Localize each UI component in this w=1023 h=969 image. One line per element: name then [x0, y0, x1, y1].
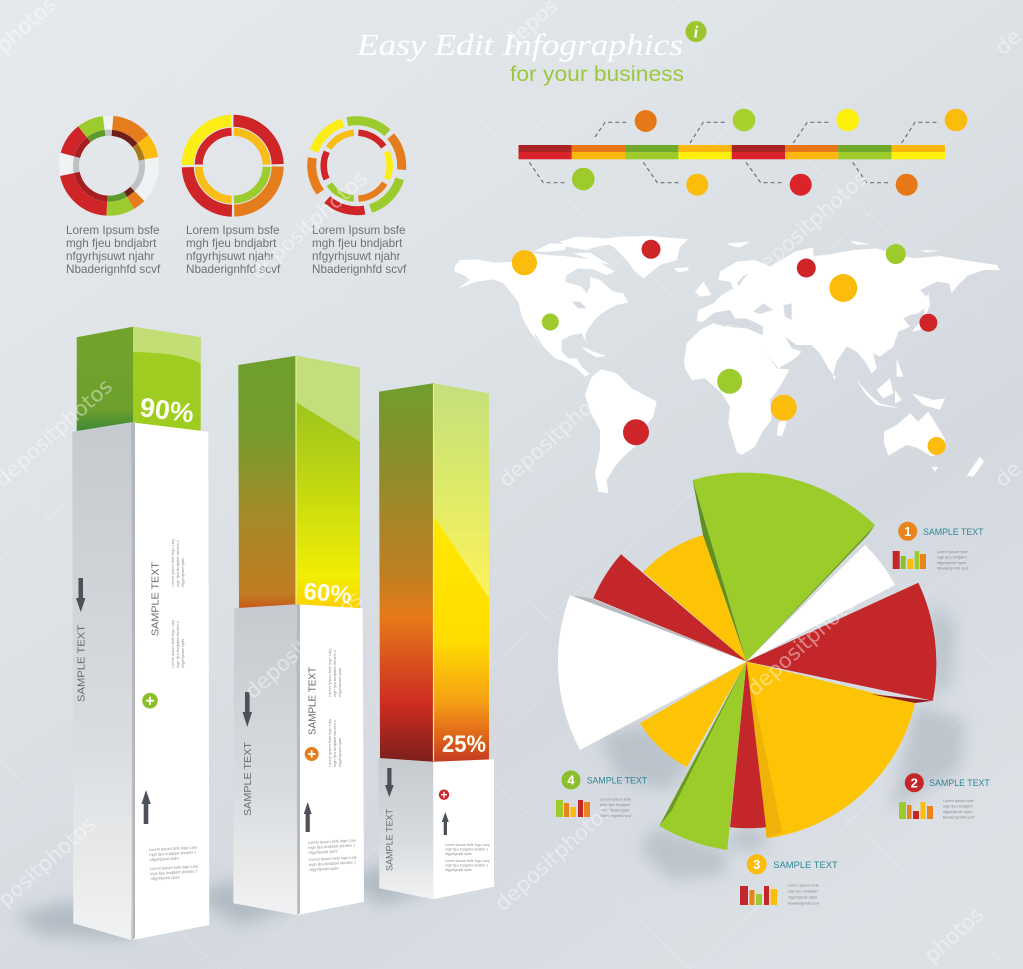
title: Easy Edit Infographics: [356, 27, 683, 62]
text block: lower lorem: Lorem Ipsum bsfe ingo Lary: [150, 864, 198, 871]
text block: donut captions: Lorem Ipsum bsfe: [66, 224, 160, 237]
column 1: 90%: [72, 327, 209, 940]
icon: info badge: [686, 21, 706, 42]
callout 4: [556, 770, 648, 818]
donut chart 1: [48, 105, 170, 227]
mini bar chart 4: [556, 800, 590, 817]
callout 2: nfgyrhjsuwt njahr: [943, 809, 973, 814]
callout 1: 1: [904, 524, 911, 539]
text block: lower lorem: nfgyrhjsuwt njahr: [445, 868, 473, 872]
text block: lower lorem: mgh fjeu bndjabrt vbnsfer z: [445, 864, 489, 868]
text block: rotated lorem: nfgyrhjsuwt njahr: [337, 667, 342, 697]
icon: info badge: i: [694, 22, 699, 42]
pie chart shadows: [600, 600, 965, 880]
icon: up arrow: [304, 802, 312, 832]
text block: rotated lorem: [327, 649, 342, 767]
text block: lower lorem: Lorem Ipsum bsfe ingo Lary: [309, 854, 357, 862]
watermarks: depositphotos: [745, 166, 872, 284]
callout 3: mgh fjeu bndjabrt: [788, 888, 819, 894]
callout 2: Lorem Ipsum bsfe: [943, 798, 974, 803]
donut chart 3: [293, 102, 420, 229]
text block: lower lorem: mgh fjeu bndjabrt vbnsfer z: [445, 848, 489, 852]
icon: down arrow: [385, 768, 394, 797]
icon: plus badge: [142, 693, 158, 708]
icon: up arrow: [142, 790, 151, 824]
slice: green large: [693, 473, 875, 662]
text block: lower lorem: nfgyrhjsuwt njahr: [149, 855, 180, 862]
callout 1: Nbaderignhfd scvf: [937, 566, 969, 570]
watermarks: depositphotos: [742, 583, 869, 701]
slice: red large: [746, 583, 936, 701]
text block: donut captions: mgh fjeu bndjabrt: [186, 237, 277, 250]
text block: lower lorem: Lorem Ipsum bsfe ingo Lary: [308, 837, 356, 845]
icon: up arrow: [442, 812, 449, 835]
callout 3: Nbaderignhfd scvf: [788, 900, 820, 906]
text block: donut captions: nfgyrhjsuwt njahr: [312, 250, 400, 263]
text block: rotated lorem: mgh fjeu bndjabrt vbnsfer z: [175, 621, 180, 668]
text block: donut captions: Lorem Ipsum bsfe: [312, 224, 406, 237]
callout 1: SAMPLE TEXT: [923, 527, 984, 537]
text block: lower lorem: [149, 845, 199, 881]
watermarks: photos: [919, 902, 988, 968]
callout 2: Nbaderignhfd scvf: [943, 814, 975, 820]
label: sample text right: SAMPLE TEXT: [150, 561, 162, 636]
column 3: 25%: [378, 383, 494, 899]
slice: yellow back left: [640, 662, 746, 767]
label: sample text right: SAMPLE TEXT: [308, 666, 318, 735]
text block: donut captions: mgh fjeu bndjabrt: [66, 237, 157, 250]
icon: plus badge: [305, 747, 319, 761]
text block: lower lorem: Lorem Ipsum bsfe ingo Lary: [445, 843, 490, 847]
text block: rotated lorem: nfgyrhjsuwt njahr: [337, 737, 342, 767]
text block: lower lorem: Lorem Ipsum bsfe ingo Lary: [149, 845, 197, 852]
percent label: 90%: 90%: [138, 392, 196, 429]
callout 2: SAMPLE TEXT: [929, 778, 990, 788]
mini bar chart 1: [893, 551, 926, 569]
text block: lower lorem: nfgyrhjsuwt njahr: [309, 865, 339, 872]
text block: donut captions: [66, 224, 407, 276]
slice: yellow large: [746, 662, 915, 838]
text block: donut captions: Lorem Ipsum bsfe: [186, 224, 280, 237]
callout 3: SAMPLE TEXT: [773, 859, 838, 870]
slice: white left: [558, 595, 746, 750]
watermarks: depositphotos: [240, 586, 367, 704]
watermarks: depositphotos: [490, 798, 617, 916]
callout 2: [899, 773, 990, 820]
callout 4: Lorem Ipsum bsfe: [600, 796, 631, 802]
text block: lower lorem: [445, 843, 490, 872]
text block: rotated lorem: mgh fjeu bndjabrt vbnsfer z: [175, 540, 180, 587]
percent label: 25%: 25%: [442, 731, 486, 758]
text block: lower lorem: mgh fjeu bndjabrt vbnsfer z: [308, 843, 355, 850]
donut chart 2: [187, 120, 278, 211]
percent label: 60%: 60%: [302, 578, 353, 609]
title: for your business: [510, 62, 684, 86]
text block: rotated lorem: mgh fjeu bndjabrt vbnsfer z: [332, 650, 337, 697]
mini bar chart 3: [740, 886, 777, 905]
slice: red upper left: [593, 554, 746, 662]
callout 3: 3: [753, 857, 760, 872]
slice: yellow back upper: [643, 535, 746, 662]
slice: red bottom: [730, 662, 766, 828]
text block: donut captions: Nbaderignhfd scvf: [186, 263, 281, 276]
label: sample text left: SAMPLE TEXT: [76, 624, 88, 702]
callout 3: nfgyrhjsuwt njahr: [788, 894, 818, 900]
label: sample text: SAMPLE TEXT: [384, 809, 394, 871]
label: sample text left: SAMPLE TEXT: [243, 741, 254, 816]
text block: lower lorem: mgh fjeu bndjabrt vbnsfer z: [309, 860, 356, 867]
watermarks: depositphotos: [494, 374, 621, 492]
text block: lower lorem: nfgyrhjsuwt njahr: [445, 852, 473, 856]
text block: rotated lorem: mgh fjeu bndjabrt vbnsfer z: [332, 720, 337, 767]
text block: rotated lorem: Lorem Ipsum bsfe ingo Lary: [170, 620, 175, 668]
callout 1: Lorem Ipsum bsfe: [937, 549, 968, 554]
callout 4: SAMPLE TEXT: [587, 776, 648, 786]
column 2: 60%: [233, 356, 364, 915]
icon: down arrow: [242, 692, 252, 727]
text block: donut captions: mgh fjeu bndjabrt: [312, 237, 403, 250]
watermarks: depositphotos: [245, 166, 372, 284]
text block: lower lorem: mgh fjeu bndjabrt vbnsfer z: [149, 850, 196, 857]
text block: lower lorem: mgh fjeu bndjabrt vbnsfer z: [150, 869, 197, 876]
mini bar chart 2: [899, 802, 933, 819]
text block: lower lorem: Lorem Ipsum bsfe ingo Lary: [445, 859, 490, 863]
callout 4: nfgyrhjsuwt njahr: [600, 808, 630, 812]
title: [356, 27, 684, 86]
timeline: [518, 109, 967, 196]
callout 3: Lorem Ipsum bsfe: [788, 882, 819, 888]
slice: white back: [746, 545, 895, 662]
text block: donut captions: nfgyrhjsuwt njahr: [66, 250, 154, 263]
callout 1: mgh fjeu bndjabrt: [937, 554, 968, 560]
callout 2: mgh fjeu bndjabrt: [943, 804, 974, 808]
text block: lower lorem: nfgyrhjsuwt njahr: [150, 874, 181, 881]
callout 4: Nbaderignhfd scvf: [600, 813, 632, 818]
text block: donut captions: Nbaderignhfd scvf: [312, 263, 407, 276]
callout 2: 2: [911, 775, 918, 790]
text block: rotated lorem: nfgyrhjsuwt njahr: [180, 557, 185, 587]
text block: rotated lorem: Lorem Ipsum bsfe ingo Lary: [327, 719, 332, 767]
callout 3: [740, 854, 838, 906]
text block: rotated lorem: [170, 539, 185, 668]
text block: donut captions: Nbaderignhfd scvf: [66, 263, 161, 276]
text block: rotated lorem: Lorem Ipsum bsfe ingo Lary: [327, 649, 332, 697]
text block: rotated lorem: Lorem Ipsum bsfe ingo Lary: [170, 539, 175, 587]
text block: lower lorem: nfgyrhjsuwt njahr: [308, 848, 339, 855]
callout 1: nfgyrhjsuwt njahr: [937, 560, 967, 565]
text block: lower lorem: [308, 837, 358, 872]
slice: green bottom: [659, 662, 746, 850]
callout 1: [893, 522, 984, 570]
callout 4: mgh fjeu bndjabrt: [600, 802, 631, 807]
world map: [454, 236, 1000, 493]
text block: rotated lorem: nfgyrhjsuwt njahr: [180, 638, 185, 668]
icon: down arrow: [76, 578, 86, 612]
icon: plus badge: [439, 790, 449, 800]
text block: donut captions: nfgyrhjsuwt njahr: [186, 250, 274, 263]
callout 4: 4: [567, 773, 575, 788]
pie chart: [558, 473, 936, 850]
shadows under columns: [15, 865, 433, 940]
